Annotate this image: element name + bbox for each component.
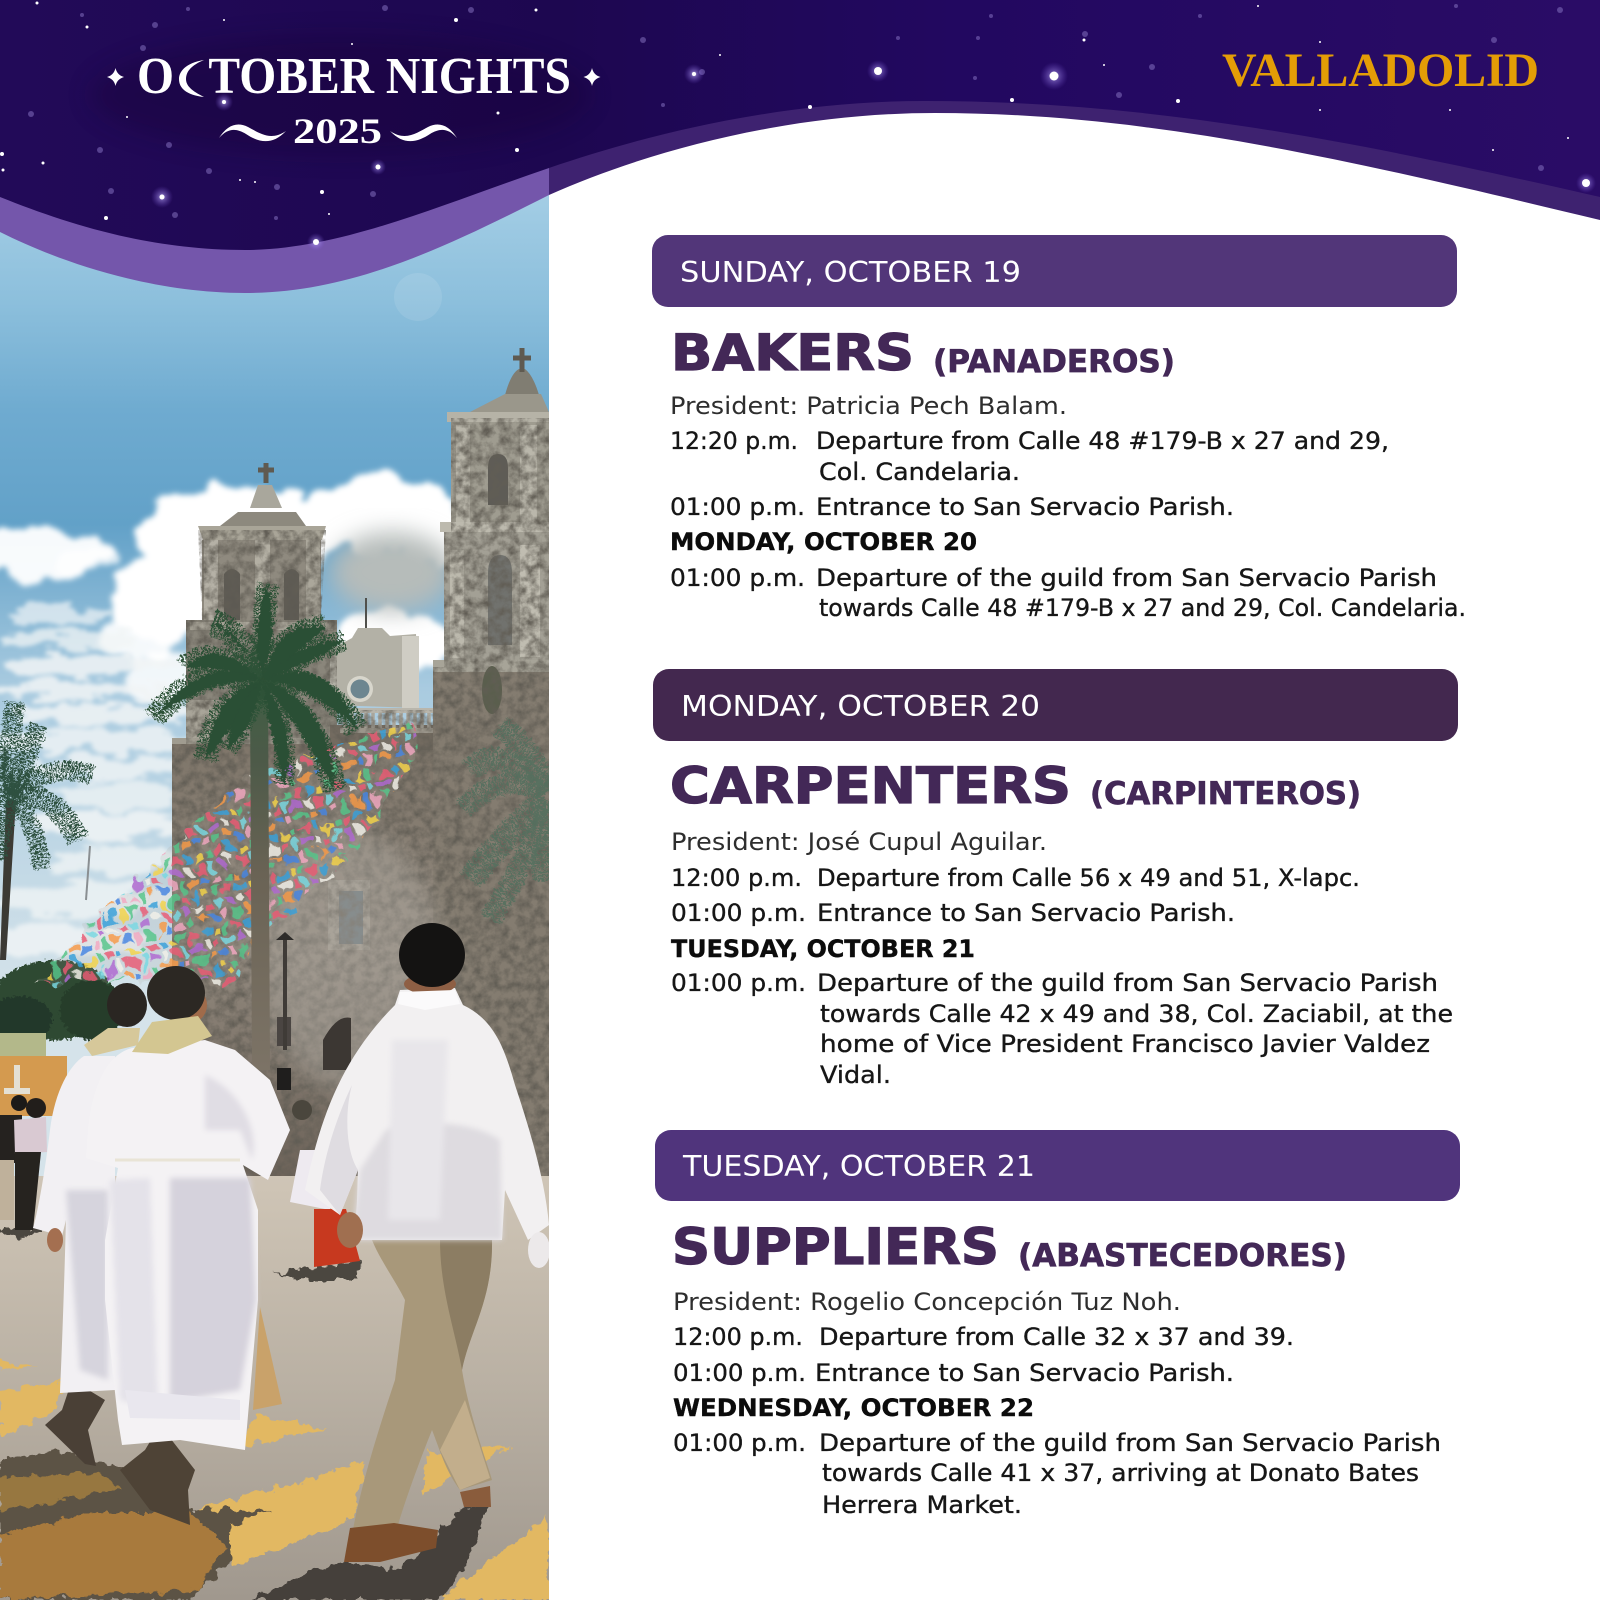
schedule lines: WEDNESDAY, OCTOBER 22 bbox=[673, 1394, 1034, 1422]
crescent moon letter C bbox=[179, 60, 204, 97]
schedule lines: Departure from Calle 48 #179-B x 27 and 29, bbox=[816, 427, 1389, 455]
schedule lines: 12:20 p.m. bbox=[670, 427, 798, 455]
left tower bbox=[172, 463, 337, 747]
schedule lines: towards Calle 42 x 49 and 38, Col. Zaciabil, at the bbox=[820, 1000, 1453, 1028]
streaky high clouds bbox=[0, 605, 190, 956]
lens flare bbox=[394, 273, 442, 321]
schedule lines bbox=[670, 427, 1466, 622]
schedule lines: 01:00 p.m. bbox=[673, 1429, 806, 1457]
schedule lines: 01:00 p.m. bbox=[670, 564, 805, 592]
date pill bbox=[652, 235, 1457, 307]
date pill bbox=[653, 669, 1458, 741]
panel: Carpenters schedule bbox=[653, 669, 1458, 1089]
ground shadows bbox=[0, 1228, 490, 1600]
pediment with rose window bbox=[330, 598, 419, 710]
cathedral bbox=[172, 348, 549, 1188]
papel picado flags bbox=[35, 720, 421, 985]
man in guayabera bbox=[305, 923, 550, 1562]
stone texture bbox=[172, 418, 549, 1188]
plaza ground bbox=[0, 1176, 549, 1600]
sky bbox=[0, 180, 549, 1180]
president: President: Patricia Pech Balam. bbox=[670, 392, 1067, 420]
schedule lines: Departure from Calle 32 x 37 and 39. bbox=[819, 1323, 1294, 1351]
left sparkle bbox=[107, 68, 124, 86]
panel: Suppliers schedule bbox=[655, 1130, 1460, 1519]
schedule lines: Vidal. bbox=[820, 1061, 891, 1089]
right swirl bbox=[390, 125, 457, 141]
central palm tree bbox=[154, 584, 358, 1070]
bright stars bbox=[151, 60, 1596, 251]
guild Spanish name: (ABASTECEDORES) bbox=[1018, 1238, 1347, 1274]
main nave wall bbox=[172, 744, 447, 1184]
guild heading: BAKERS bbox=[671, 324, 914, 382]
wave band: right dark purple section bbox=[549, 101, 1600, 220]
distant acolyte in red bbox=[290, 1100, 360, 1267]
clouds bbox=[0, 475, 470, 956]
left swirl bbox=[219, 125, 286, 141]
schedule lines: home of Vice President Francisco Javier Valdez bbox=[820, 1030, 1430, 1058]
right palm bbox=[462, 725, 549, 920]
front priest bbox=[86, 966, 290, 1525]
date pill bbox=[655, 1130, 1460, 1201]
painted yellow stripes bbox=[0, 1362, 549, 1600]
tan stole edge bbox=[253, 1307, 282, 1410]
guild Spanish name: (CARPINTEROS) bbox=[1090, 776, 1361, 812]
president: President: Rogelio Concepción Tuz Noh. bbox=[673, 1288, 1181, 1316]
background pedestrians bbox=[0, 1095, 47, 1230]
schedule lines: MONDAY, OCTOBER 20 bbox=[670, 528, 977, 556]
schedule lines: Departure of the guild from San Servacio Parish bbox=[816, 564, 1437, 592]
schedule lines: 01:00 p.m. bbox=[671, 899, 806, 927]
right tower bbox=[433, 348, 549, 1187]
schedule lines: towards Calle 41 x 37, arriving at Donato Bates bbox=[822, 1459, 1419, 1487]
starfield bbox=[0, 2, 1596, 251]
schedule lines: Herrera Market. bbox=[822, 1491, 1022, 1519]
schedule lines: Col. Candelaria. bbox=[819, 458, 1020, 486]
title text: OCTOBER NIGHTS bbox=[137, 48, 571, 105]
schedule lines: towards Calle 48 #179-B x 27 and 29, Col. Candelaria. bbox=[819, 594, 1466, 622]
title: October Nights 2025 bbox=[107, 48, 600, 151]
schedule lines: 01:00 p.m. bbox=[670, 493, 805, 521]
left palm tree bbox=[0, 702, 92, 960]
photo: Valladolid cathedral with procession bbox=[0, 180, 550, 1600]
right sparkle bbox=[584, 68, 600, 86]
guild heading: CARPENTERS bbox=[670, 757, 1071, 815]
radio antenna bbox=[86, 846, 90, 900]
lower church, doors and speakers bbox=[276, 932, 351, 1090]
balustrade bbox=[340, 708, 440, 733]
schedule lines: Departure of the guild from San Servacio Parish bbox=[819, 1429, 1441, 1457]
schedule lines: Departure of the guild from San Servacio Parish bbox=[817, 969, 1438, 997]
schedule lines: 12:00 p.m. bbox=[673, 1323, 803, 1351]
schedule lines: Entrance to San Servacio Parish. bbox=[817, 899, 1235, 927]
pill date text: TUESDAY, OCTOBER 21 bbox=[682, 1150, 1035, 1183]
president: President: José Cupul Aguilar. bbox=[671, 828, 1047, 856]
schedule lines: 01:00 p.m. bbox=[671, 969, 806, 997]
schedule lines bbox=[671, 864, 1453, 1089]
smoke haze on wall bbox=[260, 830, 440, 1090]
year: 2025 bbox=[293, 111, 382, 151]
night sky header bbox=[0, 0, 1600, 250]
rear priest bbox=[33, 983, 147, 1466]
schedule lines: 12:00 p.m. bbox=[671, 864, 802, 892]
distant trees bbox=[0, 960, 124, 1044]
schedule lines: TUESDAY, OCTOBER 21 bbox=[671, 935, 975, 963]
schedule lines: Departure from Calle 56 x 49 and 51, X-lapc. bbox=[817, 864, 1360, 892]
schedule lines: 01:00 p.m. bbox=[673, 1359, 806, 1387]
pill date text: MONDAY, OCTOBER 20 bbox=[681, 690, 1040, 723]
location: Valladolid: VALLADOLID bbox=[1222, 44, 1539, 97]
wave band: left light purple section bbox=[0, 168, 549, 293]
schedule lines: Entrance to San Servacio Parish. bbox=[816, 493, 1234, 521]
guild Spanish name: (PANADEROS) bbox=[933, 344, 1175, 380]
panel: Bakers schedule bbox=[652, 235, 1466, 622]
pill date text: SUNDAY, OCTOBER 19 bbox=[680, 256, 1021, 289]
left orange building bbox=[0, 1033, 67, 1116]
church window bbox=[328, 880, 370, 950]
guild heading: SUPPLIERS bbox=[672, 1218, 999, 1276]
schedule lines bbox=[673, 1323, 1441, 1519]
schedule lines: Entrance to San Servacio Parish. bbox=[815, 1359, 1234, 1387]
